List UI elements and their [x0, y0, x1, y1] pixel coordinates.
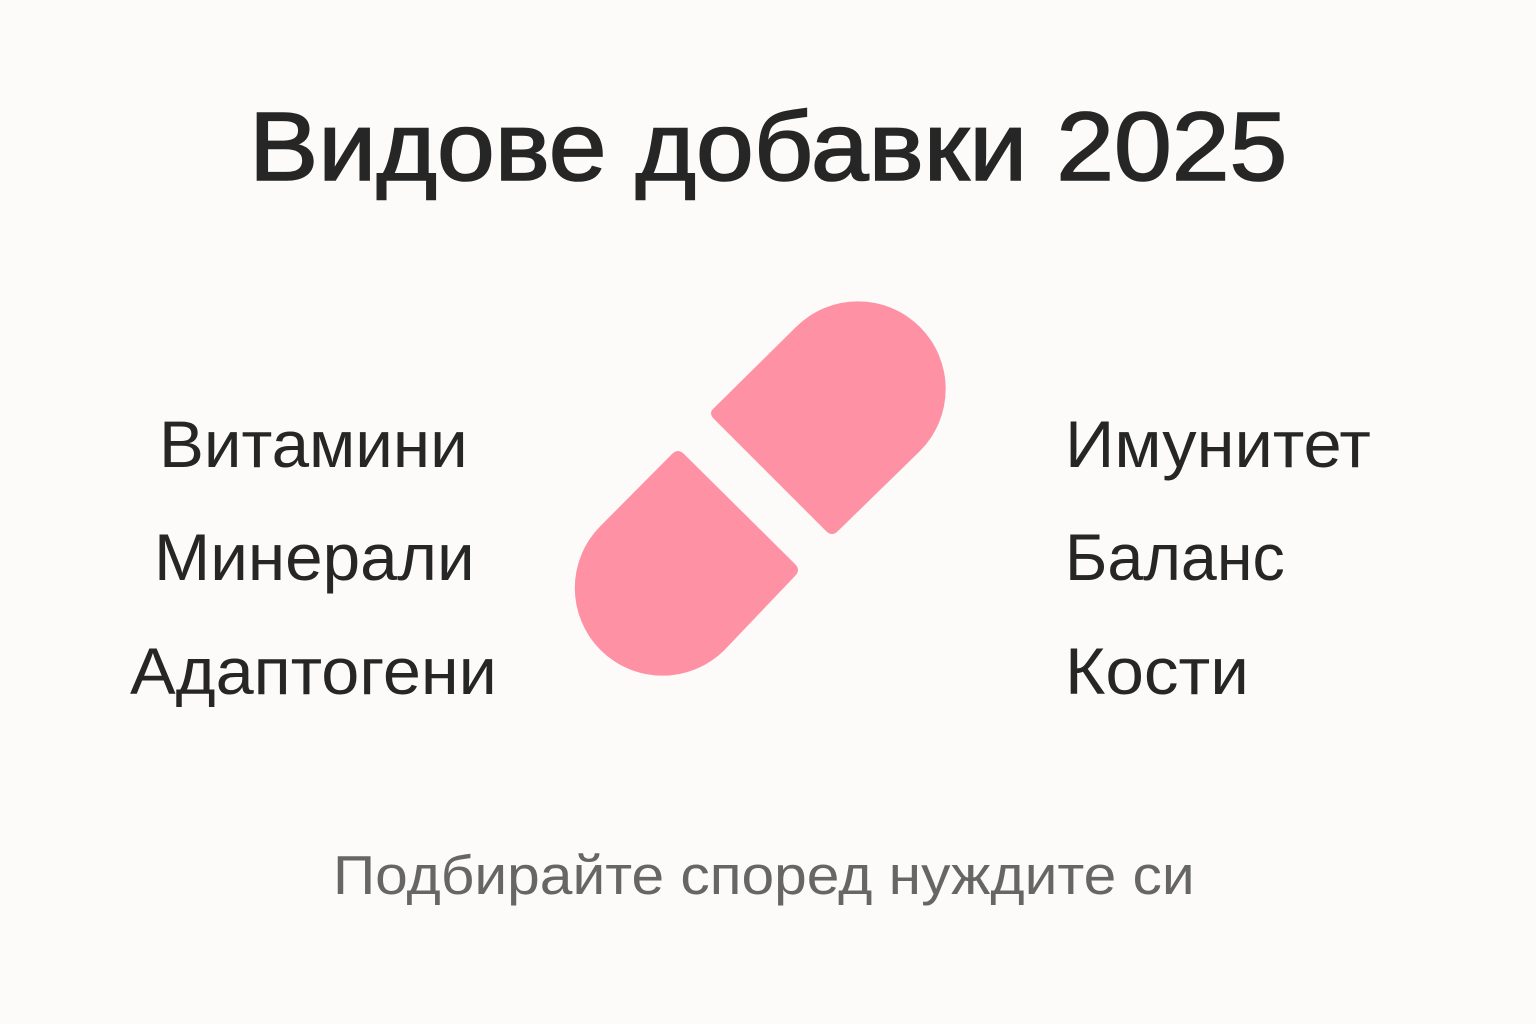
- title: Видове добавки 2025: [249, 92, 1287, 201]
- icon: pink split capsule: [574, 301, 946, 676]
- label: adaptogens: Адаптогени: [130, 634, 497, 708]
- capsule lower half: [575, 451, 798, 676]
- label: minerals: Минерали: [154, 520, 475, 594]
- label: vitamins: Витамини: [159, 407, 468, 481]
- label: bones: Кости: [1065, 634, 1249, 708]
- label: immunity: Имунитет: [1065, 407, 1371, 481]
- capsule upper half: [711, 301, 946, 534]
- left list: [130, 407, 497, 708]
- footer text: Подбирайте според нуждите си: [333, 844, 1195, 906]
- label: balance: Баланс: [1065, 520, 1285, 594]
- right list: [1065, 407, 1371, 708]
